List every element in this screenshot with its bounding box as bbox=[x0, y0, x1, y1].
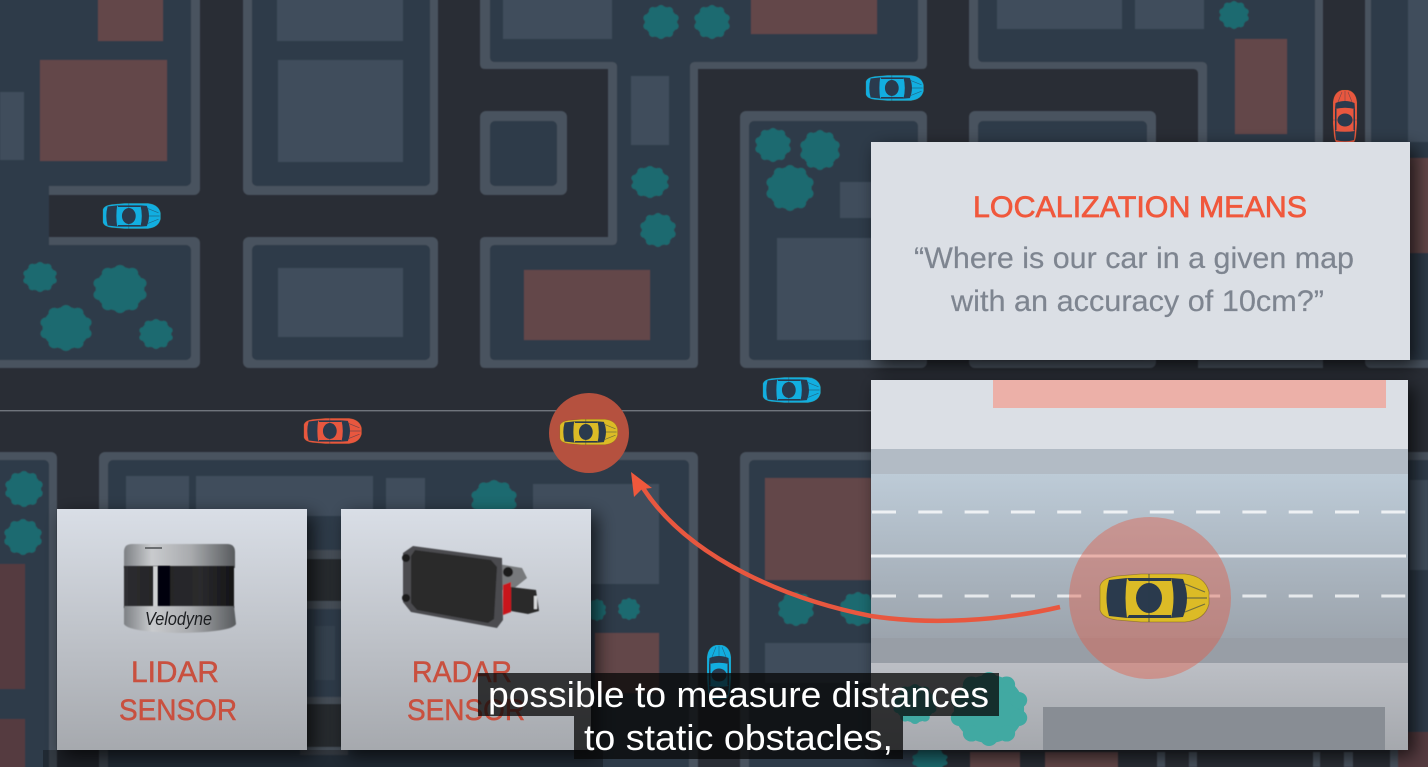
ego car marker on map bbox=[549, 393, 629, 473]
sensor label: RADAR bbox=[412, 656, 512, 689]
position circle bbox=[1069, 517, 1231, 679]
panel: zoomed road view bbox=[871, 380, 1408, 750]
caption text: possible to measure distances bbox=[488, 674, 989, 715]
block: second column lower bbox=[243, 237, 438, 368]
arrow from zoomed view to map bbox=[631, 472, 1060, 621]
callout card: localization definition bbox=[871, 142, 1410, 360]
car: yellow bbox=[560, 419, 618, 445]
sensor label: SENSOR bbox=[119, 694, 237, 727]
caption text: to static obstacles, bbox=[584, 717, 893, 758]
strip below the big card bbox=[1157, 752, 1353, 767]
panel background bbox=[871, 380, 1408, 750]
block: far right bottom bbox=[1390, 452, 1428, 767]
sidewalk bbox=[871, 663, 1408, 750]
caption text bbox=[488, 674, 989, 758]
card heading: LOCALIZATION MEANS bbox=[973, 191, 1307, 224]
caption backgrounds bbox=[478, 673, 999, 759]
block: second column top bbox=[243, 0, 438, 195]
block: top left bbox=[0, 0, 200, 195]
sensor label bbox=[119, 656, 237, 727]
video caption bbox=[478, 673, 999, 759]
pink building bbox=[993, 380, 1386, 408]
card background bbox=[57, 509, 307, 750]
block: upper right connected bbox=[969, 0, 1323, 368]
dark shade along the bottom edge bbox=[43, 750, 603, 767]
side strip left of road bbox=[0, 185, 49, 247]
lane markings bbox=[871, 512, 1406, 596]
sensor label: LIDAR bbox=[131, 656, 219, 689]
block: bottom right bbox=[740, 452, 927, 767]
car: blue vertical bbox=[707, 645, 731, 700]
car: blue on main road bbox=[763, 377, 821, 403]
gray building bbox=[1043, 707, 1385, 750]
icon: radar unit bbox=[402, 546, 539, 628]
panel: lidar sensor bbox=[57, 509, 307, 750]
card quote bbox=[914, 242, 1354, 318]
brand label: Velodyne bbox=[145, 609, 212, 629]
card background bbox=[871, 142, 1410, 360]
highlight circle bbox=[549, 393, 629, 473]
card quote: “Where is our car in a given map bbox=[914, 242, 1354, 275]
card background bbox=[341, 509, 591, 750]
icon: lidar unit bbox=[124, 544, 236, 633]
block: bottom middle bbox=[99, 452, 698, 767]
block: mid right bbox=[740, 111, 927, 368]
strip between the sensor cards bbox=[300, 550, 348, 755]
sensor label: SENSOR bbox=[407, 694, 525, 727]
car: blue top bbox=[866, 75, 924, 101]
block: far right bbox=[1365, 0, 1428, 368]
road centre line bbox=[0, 410, 871, 411]
block: bottom far left bbox=[0, 452, 57, 767]
car: red vertical bbox=[1333, 90, 1357, 144]
upper shoulder bbox=[871, 449, 1408, 474]
car: yellow large bbox=[1100, 574, 1209, 622]
trees over zoomed panel bbox=[893, 672, 1027, 746]
card quote: with an accuracy of 10cm?” bbox=[950, 285, 1324, 318]
car: red on main road bbox=[304, 418, 362, 444]
block: left lower bbox=[0, 237, 200, 368]
road surface bbox=[871, 474, 1408, 638]
panel: radar sensor bbox=[341, 509, 591, 750]
block: central connected bbox=[480, 0, 927, 368]
island block bbox=[480, 111, 567, 195]
car: blue left bbox=[103, 203, 161, 229]
block: behind card bbox=[969, 111, 1156, 368]
lower shoulder bbox=[871, 638, 1408, 663]
sensor label bbox=[407, 656, 525, 727]
